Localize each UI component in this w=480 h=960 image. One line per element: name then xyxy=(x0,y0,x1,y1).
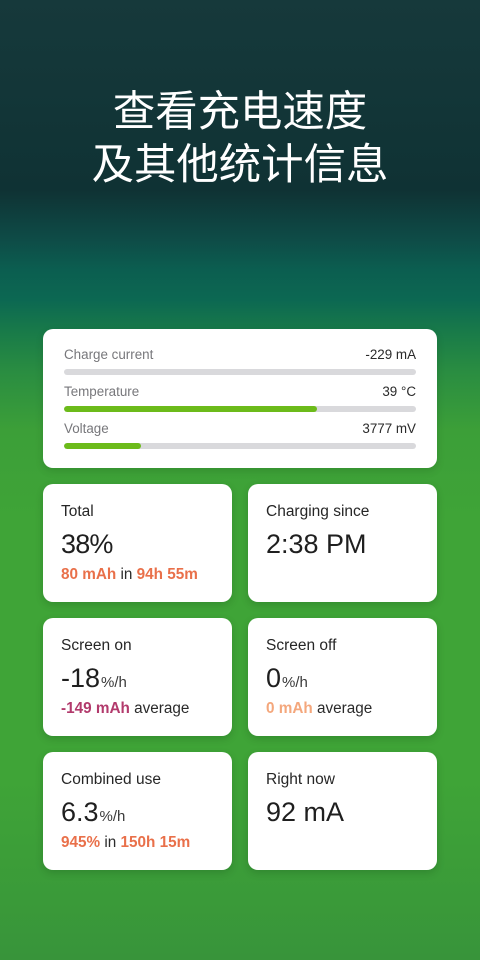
panel: battery readings xyxy=(43,329,437,468)
combined use value: 6.3%/h xyxy=(61,797,125,827)
charge current label: Charge current xyxy=(64,347,153,362)
charging since label: Charging since xyxy=(266,503,369,520)
combined use detail: 945% in 150h 15m xyxy=(61,834,190,851)
title xyxy=(92,88,388,188)
screen on value: -18%/h xyxy=(61,663,127,693)
total value: 38% xyxy=(61,529,113,559)
title: 及其他统计信息 xyxy=(92,141,388,188)
total label: Total xyxy=(61,503,94,520)
panel: screen on xyxy=(43,618,232,736)
temperature value: 39 °C xyxy=(382,384,416,399)
charging since value: 2:38 PM xyxy=(266,529,367,559)
panel: total xyxy=(43,484,232,602)
screen off detail: 0 mAh average xyxy=(266,700,372,717)
screen on detail: -149 mAh average xyxy=(61,700,189,717)
panel: combined use xyxy=(43,752,232,870)
screen on label: Screen on xyxy=(61,637,132,654)
title: 查看充电速度 xyxy=(113,88,367,135)
charge current bar xyxy=(64,369,416,375)
total detail: 80 mAh in 94h 55m xyxy=(61,566,198,583)
temperature label: Temperature xyxy=(64,384,139,399)
combined use label: Combined use xyxy=(61,771,161,788)
screen off value: 0%/h xyxy=(266,663,308,693)
right now label: Right now xyxy=(266,771,335,788)
panel: charging since xyxy=(248,484,437,602)
screen off label: Screen off xyxy=(266,637,336,654)
voltage bar xyxy=(64,443,416,449)
temperature bar xyxy=(64,406,416,412)
panel: screen off xyxy=(248,618,437,736)
voltage value: 3777 mV xyxy=(362,421,416,436)
right now value: 92 mA xyxy=(266,797,344,827)
panel: right now xyxy=(248,752,437,870)
charge current value: -229 mA xyxy=(365,347,416,362)
voltage label: Voltage xyxy=(64,421,109,436)
